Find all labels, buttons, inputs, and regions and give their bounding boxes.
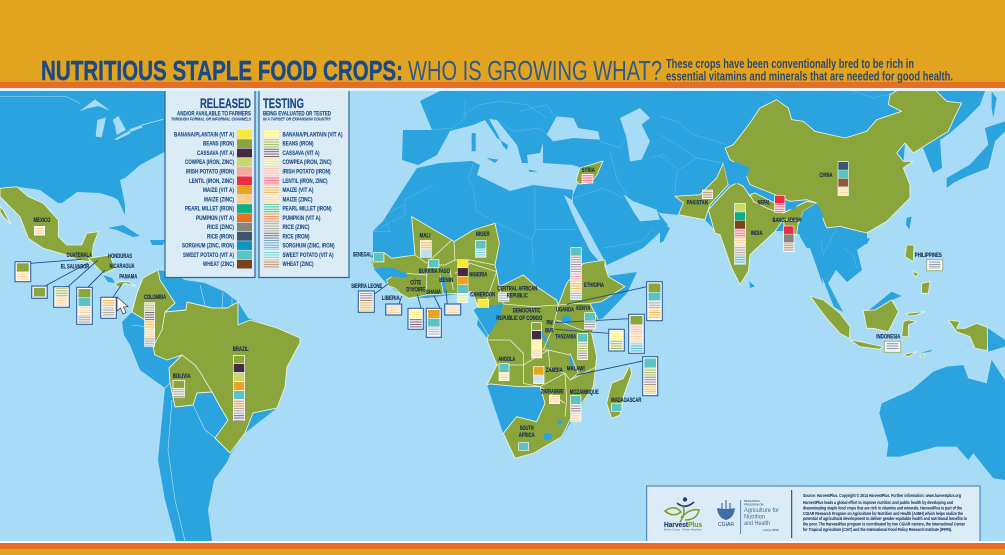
country labels: MEXICO bbox=[34, 217, 51, 224]
Zambia swatch bbox=[533, 366, 544, 384]
Country borders in green bbox=[407, 240, 597, 417]
country labels: ANGOLA bbox=[498, 356, 516, 363]
released labels: COWPEA (IRON, ZINC) bbox=[185, 159, 234, 166]
released labels: PUMPKIN (VIT A) bbox=[196, 215, 234, 222]
Mexico swatch bbox=[34, 226, 45, 236]
country labels: MADAGASCAR bbox=[611, 397, 642, 404]
testing labels: RICE (ZINC) bbox=[282, 224, 310, 231]
logo: HarvestPlus bbox=[664, 497, 702, 532]
Bangladesh swatch bbox=[783, 226, 794, 252]
country labels: CHINA bbox=[820, 172, 833, 179]
released labels: SWEET POTATO (VIT A) bbox=[183, 252, 234, 259]
Madagascar swatch bbox=[611, 403, 622, 412]
country labels: BURKINA FASO bbox=[419, 268, 450, 275]
released labels: MAIZE (ZINC) bbox=[204, 196, 234, 203]
testing labels: PEARL MILLET (IRON) bbox=[282, 206, 332, 213]
logo: Agriculture for Nutrition and Health: RESEARCH bbox=[744, 499, 760, 503]
country labels: BOLIVIA bbox=[173, 373, 191, 380]
country labels: COLOMBIA bbox=[144, 294, 166, 301]
released swatches bbox=[237, 130, 252, 268]
title: NUTRITIOUS STAPLE FOOD CROPS: bbox=[41, 55, 403, 86]
testing labels: BEANS (IRON) bbox=[282, 141, 314, 148]
country labels: HONDURAS bbox=[108, 253, 132, 260]
country labels: NICARAGUA bbox=[110, 263, 135, 270]
subtitle bbox=[666, 57, 953, 84]
country labels: REPUBLIC bbox=[507, 293, 528, 300]
released sub heading: AND/OR AVAILABLE TO FARMERS bbox=[177, 112, 251, 118]
logo: HarvestPlus: Better Crops · Better Nutrition bbox=[664, 528, 702, 532]
Bolivia swatch bbox=[173, 380, 185, 397]
testing sub heading: BEING EVALUATED OR TESTED bbox=[263, 112, 331, 118]
country labels: CENTRAL AFRICAN bbox=[497, 286, 538, 293]
South America land bbox=[122, 270, 300, 541]
released labels: BEANS (IRON) bbox=[203, 141, 234, 148]
testing labels: MAIZE (VIT A) bbox=[282, 187, 314, 194]
country labels: BRAZIL bbox=[233, 346, 249, 353]
country labels: PAKISTAN bbox=[687, 200, 708, 207]
Benin callout bbox=[445, 304, 461, 315]
testing labels: IRISH POTATO (IRON) bbox=[282, 168, 330, 176]
country labels: BUR. bbox=[545, 328, 554, 335]
vertical divider bbox=[791, 490, 793, 538]
released labels: MAIZE (VIT A) bbox=[203, 187, 234, 194]
South America borders bbox=[132, 285, 232, 541]
Colombia swatch bbox=[144, 302, 155, 347]
country labels: TANZANIA bbox=[555, 334, 577, 341]
Burundi callout bbox=[609, 329, 624, 351]
released heading: RELEASED bbox=[200, 96, 251, 111]
Zimbabwe swatch bbox=[549, 395, 560, 404]
credits text: for Tropical Agriculture (CIAT) and the International Food Policy Research Institute (IFPRI). bbox=[803, 527, 952, 532]
El Salvador callout bbox=[32, 286, 47, 298]
country labels: BENIN bbox=[439, 277, 454, 284]
released labels: CASSAVA (VIT A) bbox=[197, 150, 234, 157]
footer band bbox=[0, 541, 1005, 555]
Liberia callout bbox=[386, 304, 402, 315]
Seas bbox=[472, 108, 660, 221]
released sub heading bbox=[171, 112, 252, 122]
country labels: SENEGAL bbox=[353, 252, 372, 259]
Ethiopia swatch bbox=[570, 247, 582, 300]
testing labels bbox=[282, 131, 342, 268]
credits text bbox=[803, 492, 967, 532]
released labels bbox=[174, 131, 234, 268]
country labels: INDIA bbox=[751, 230, 763, 237]
country labels: ZAMBIA bbox=[546, 367, 563, 374]
Central African Republic swatch bbox=[498, 292, 509, 302]
panel: released legend bbox=[165, 91, 255, 278]
Panama callout bbox=[101, 297, 116, 318]
Cote d'Ivoire callout bbox=[408, 308, 423, 329]
testing labels: WHEAT (ZINC) bbox=[282, 261, 314, 268]
Southeast Asia and Australia bbox=[810, 245, 1005, 480]
South Africa swatch bbox=[518, 442, 529, 451]
Pakistan swatch bbox=[702, 190, 713, 199]
testing labels: LENTIL (IRON, ZINC) bbox=[282, 178, 328, 185]
logo: Agriculture for Nutrition and Health: and Health bbox=[744, 520, 770, 527]
DRC swatch bbox=[531, 322, 542, 358]
released labels: SORGHUM (ZINC, IRON) bbox=[182, 243, 234, 250]
country labels: SIERRA LEONE bbox=[351, 283, 382, 290]
icon: mouse cursor bbox=[117, 297, 128, 314]
Colombia, Brazil, Bolivia bbox=[132, 270, 300, 453]
logo divider bbox=[740, 500, 742, 534]
country labels: NEPAL bbox=[758, 200, 771, 207]
country labels: D'IVOIRE bbox=[406, 287, 425, 294]
testing labels: PUMPKIN (VIT A) bbox=[282, 215, 320, 222]
Uganda callout bbox=[647, 282, 662, 321]
logo: HarvestPlus: HarvestPlus bbox=[664, 522, 702, 529]
country labels: PANAMA bbox=[119, 274, 138, 281]
country labels: INDONESIA bbox=[876, 334, 901, 341]
testing labels: SWEET POTATO (VIT A) bbox=[282, 252, 334, 259]
country labels: SOUTH bbox=[520, 425, 534, 432]
Sierra Leone callout bbox=[358, 291, 374, 312]
logo: Agriculture for Nutrition and Health bbox=[744, 499, 779, 532]
country labels: MOZAMBIQUE bbox=[570, 389, 599, 396]
Mexico and Central America bbox=[0, 187, 136, 287]
Angola swatch bbox=[499, 363, 509, 381]
logo: Agriculture for Nutrition and Health: Agriculture for bbox=[744, 507, 779, 514]
logo: CGIAR: CGIAR bbox=[718, 522, 734, 528]
Kashmir and Asian green countries bbox=[675, 88, 962, 285]
released labels: BANANA/PLANTAIN (VIT A) bbox=[174, 131, 234, 138]
country labels: LIBERIA bbox=[382, 295, 400, 302]
testing labels: RICE (IRON) bbox=[282, 233, 310, 240]
country labels: GHANA bbox=[426, 289, 441, 296]
Mali swatch bbox=[420, 240, 432, 258]
title continuation: WHO IS GROWING WHAT? bbox=[408, 55, 662, 86]
testing sub heading bbox=[263, 112, 332, 122]
Syria swatch bbox=[582, 174, 593, 183]
North Africa borders bbox=[373, 163, 577, 265]
panel: testing legend bbox=[259, 91, 349, 278]
country labels: REPUBLIC OF CONGO bbox=[496, 315, 542, 322]
testing labels: MAIZE (ZINC) bbox=[282, 196, 312, 203]
Tanzania swatch bbox=[577, 333, 588, 360]
Senegal swatch bbox=[373, 252, 384, 262]
country labels: RW. bbox=[546, 320, 554, 327]
Latin America crop swatches bbox=[15, 226, 245, 421]
callout leader lines bbox=[31, 259, 647, 375]
released labels: RICE (IRON) bbox=[207, 233, 234, 240]
testing swatches bbox=[264, 130, 279, 268]
testing sub heading: IN A TARGET OR EXPANSION COUNTRY bbox=[263, 117, 332, 122]
country labels: CÔTE bbox=[410, 278, 421, 286]
released labels: WHEAT (ZINC) bbox=[203, 261, 234, 268]
Ghana callout bbox=[426, 308, 441, 337]
country labels: ETHIOPIA bbox=[584, 282, 604, 289]
logo: Agriculture for Nutrition and Health: Nutrition bbox=[744, 514, 766, 520]
Green African countries bbox=[372, 217, 632, 458]
Malawi callout bbox=[643, 357, 658, 396]
India swatch bbox=[734, 203, 746, 265]
credits text: HarvestPlus leads a global effort to improve nutrition and public health by developing and bbox=[803, 500, 953, 505]
Mozambique swatch bbox=[570, 395, 581, 422]
subtitle: These crops have been conventionally bred to be rich in bbox=[666, 57, 914, 71]
Eurasia land bbox=[402, 91, 985, 312]
China swatch bbox=[838, 161, 849, 196]
Honduras callout bbox=[54, 287, 69, 307]
country labels: CAMEROON bbox=[470, 292, 496, 299]
released labels: PEARL MILLET (IRON) bbox=[185, 206, 234, 213]
country labels: PHILIPPINES bbox=[915, 252, 942, 259]
country labels: AFRICA bbox=[519, 432, 535, 439]
Bolivia border bbox=[182, 355, 212, 392]
Burkina Faso swatch bbox=[428, 259, 439, 268]
Great Lakes bbox=[0, 97, 163, 140]
released labels: IRISH POTATO (IRON) bbox=[186, 168, 234, 176]
released sub heading: THROUGH FORMAL OR INFORMAL CHANNELS bbox=[171, 117, 252, 122]
Guinea, Togo, Congo and lakes bbox=[373, 267, 573, 440]
Nigeria swatch bbox=[457, 259, 468, 303]
country labels bbox=[34, 167, 942, 439]
testing labels: BANANA/PLANTAIN (VIT A) bbox=[282, 131, 342, 138]
Philippines callout bbox=[927, 260, 943, 271]
East Asia islands bbox=[660, 91, 1005, 288]
testing labels: SORGHUM (ZINC, IRON) bbox=[282, 243, 334, 250]
Colombia internal border bbox=[153, 312, 165, 347]
country labels: MALAWI bbox=[567, 366, 585, 373]
testing heading: TESTING bbox=[263, 96, 304, 111]
country labels: SYRIA bbox=[582, 167, 595, 174]
panel: credits bbox=[647, 486, 980, 542]
Nicaragua callout bbox=[77, 287, 92, 324]
released labels: LENTIL (IRON, ZINC) bbox=[189, 178, 234, 185]
Cameroon swatch bbox=[478, 299, 489, 308]
country labels: MALI bbox=[420, 233, 431, 240]
Nepal swatch bbox=[774, 195, 785, 213]
testing labels: CASSAVA (VIT A) bbox=[282, 150, 320, 157]
country labels: EL SALVADOR bbox=[61, 264, 90, 271]
country labels: KENYA bbox=[576, 305, 591, 312]
country labels: ZIMBABWE bbox=[541, 389, 564, 396]
Guatemala callout bbox=[15, 262, 31, 282]
Africa land bbox=[371, 161, 637, 458]
logo: CGIAR bbox=[717, 500, 735, 528]
country labels: GUATEMALA bbox=[67, 252, 92, 259]
Kenya swatch bbox=[584, 312, 596, 329]
Syria bbox=[576, 161, 603, 184]
logo: Agriculture for Nutrition and Health: PROGRAM ON bbox=[744, 502, 764, 506]
Asian crop swatches bbox=[582, 161, 943, 352]
country labels: BANGLADESH bbox=[772, 217, 802, 224]
testing labels: COWPEA (IRON, ZINC) bbox=[282, 159, 332, 166]
Brazil swatch bbox=[233, 355, 245, 421]
header band bbox=[0, 0, 1005, 91]
country labels: UGANDA bbox=[556, 307, 574, 314]
North America bbox=[0, 91, 168, 283]
Indonesia callout bbox=[884, 341, 901, 352]
Niger swatch bbox=[475, 240, 486, 258]
released labels: RICE (ZINC) bbox=[207, 224, 234, 231]
Rwanda callout bbox=[629, 314, 644, 353]
country labels: NIGER bbox=[476, 231, 490, 238]
country labels: NIGERIA bbox=[469, 272, 488, 279]
logo: Agriculture for Nutrition and Health: Led by IFPRI bbox=[763, 528, 779, 532]
Madagascar bbox=[607, 365, 632, 418]
country labels: DEMOCRATIC bbox=[513, 308, 541, 315]
African crop swatches bbox=[358, 240, 662, 451]
Europe and Asia borders bbox=[432, 101, 670, 248]
